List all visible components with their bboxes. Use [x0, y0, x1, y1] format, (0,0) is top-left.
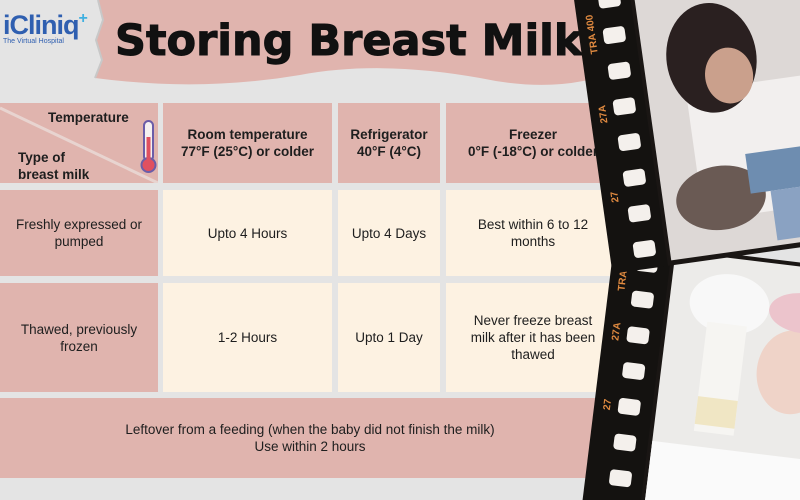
row 2: frozen: [60, 338, 98, 354]
leftover bar: Use within 2 hours: [254, 439, 366, 454]
header: room temperature: 77°F (25°C) or colder: [181, 144, 314, 159]
table header: corner: [0, 103, 158, 183]
title: Storing Breast Milk: [115, 16, 583, 66]
row 1: Freshly expressed or: [16, 217, 142, 232]
header: freezer: 0°F (-18°C) or colder: [468, 144, 598, 159]
text: thawed: [511, 347, 555, 362]
title banner: [94, 0, 586, 85]
header: refrigerator: 40°F (4°C): [357, 144, 421, 159]
icon: thermometer: [142, 121, 156, 172]
logo: iCliniq+: [3, 10, 87, 40]
film strip with photos: TRA 400: [584, 13, 601, 55]
logo: The Virtual Hospital: [3, 38, 64, 45]
table header: corner: Type of: [18, 150, 65, 165]
header: room temperature: [163, 103, 332, 183]
film strip with photos: 27A: [597, 104, 610, 124]
text: Upto 4 Days: [352, 226, 426, 240]
text: Best within 6 to 12: [478, 217, 588, 232]
text: Never freeze breast: [474, 313, 592, 328]
text: months: [511, 234, 555, 249]
text: Upto 4 Hours: [208, 226, 287, 240]
header: refrigerator: [338, 103, 440, 183]
film strip with photos: 27: [602, 398, 614, 411]
header: refrigerator: Refrigerator: [350, 127, 428, 142]
row 2: [0, 283, 158, 392]
row 1: [0, 190, 158, 276]
text: Upto 1 Day: [355, 330, 423, 345]
header: room temperature: Room temperature: [187, 127, 308, 142]
text: milk after it has been: [471, 330, 595, 345]
table header: corner: breast milk: [18, 167, 89, 182]
table header: corner: Temperature: [48, 110, 129, 125]
header: freezer: [446, 103, 620, 183]
text: 1-2 Hours: [218, 330, 277, 345]
leftover bar: Leftover from a feeding (when the baby did not finish the milk): [125, 422, 495, 437]
leftover bar: [0, 398, 620, 478]
photo: breast pump and baby: [640, 251, 800, 500]
row 2: Thawed, previously: [21, 322, 137, 336]
header: freezer: Freezer: [509, 127, 557, 142]
film strip with photos: 27A: [610, 322, 623, 341]
film strip with photos: 27: [609, 190, 622, 203]
photo: mother: [630, 0, 800, 260]
row 1: pumped: [55, 234, 103, 249]
film strip with photos: TRA: [616, 270, 630, 292]
